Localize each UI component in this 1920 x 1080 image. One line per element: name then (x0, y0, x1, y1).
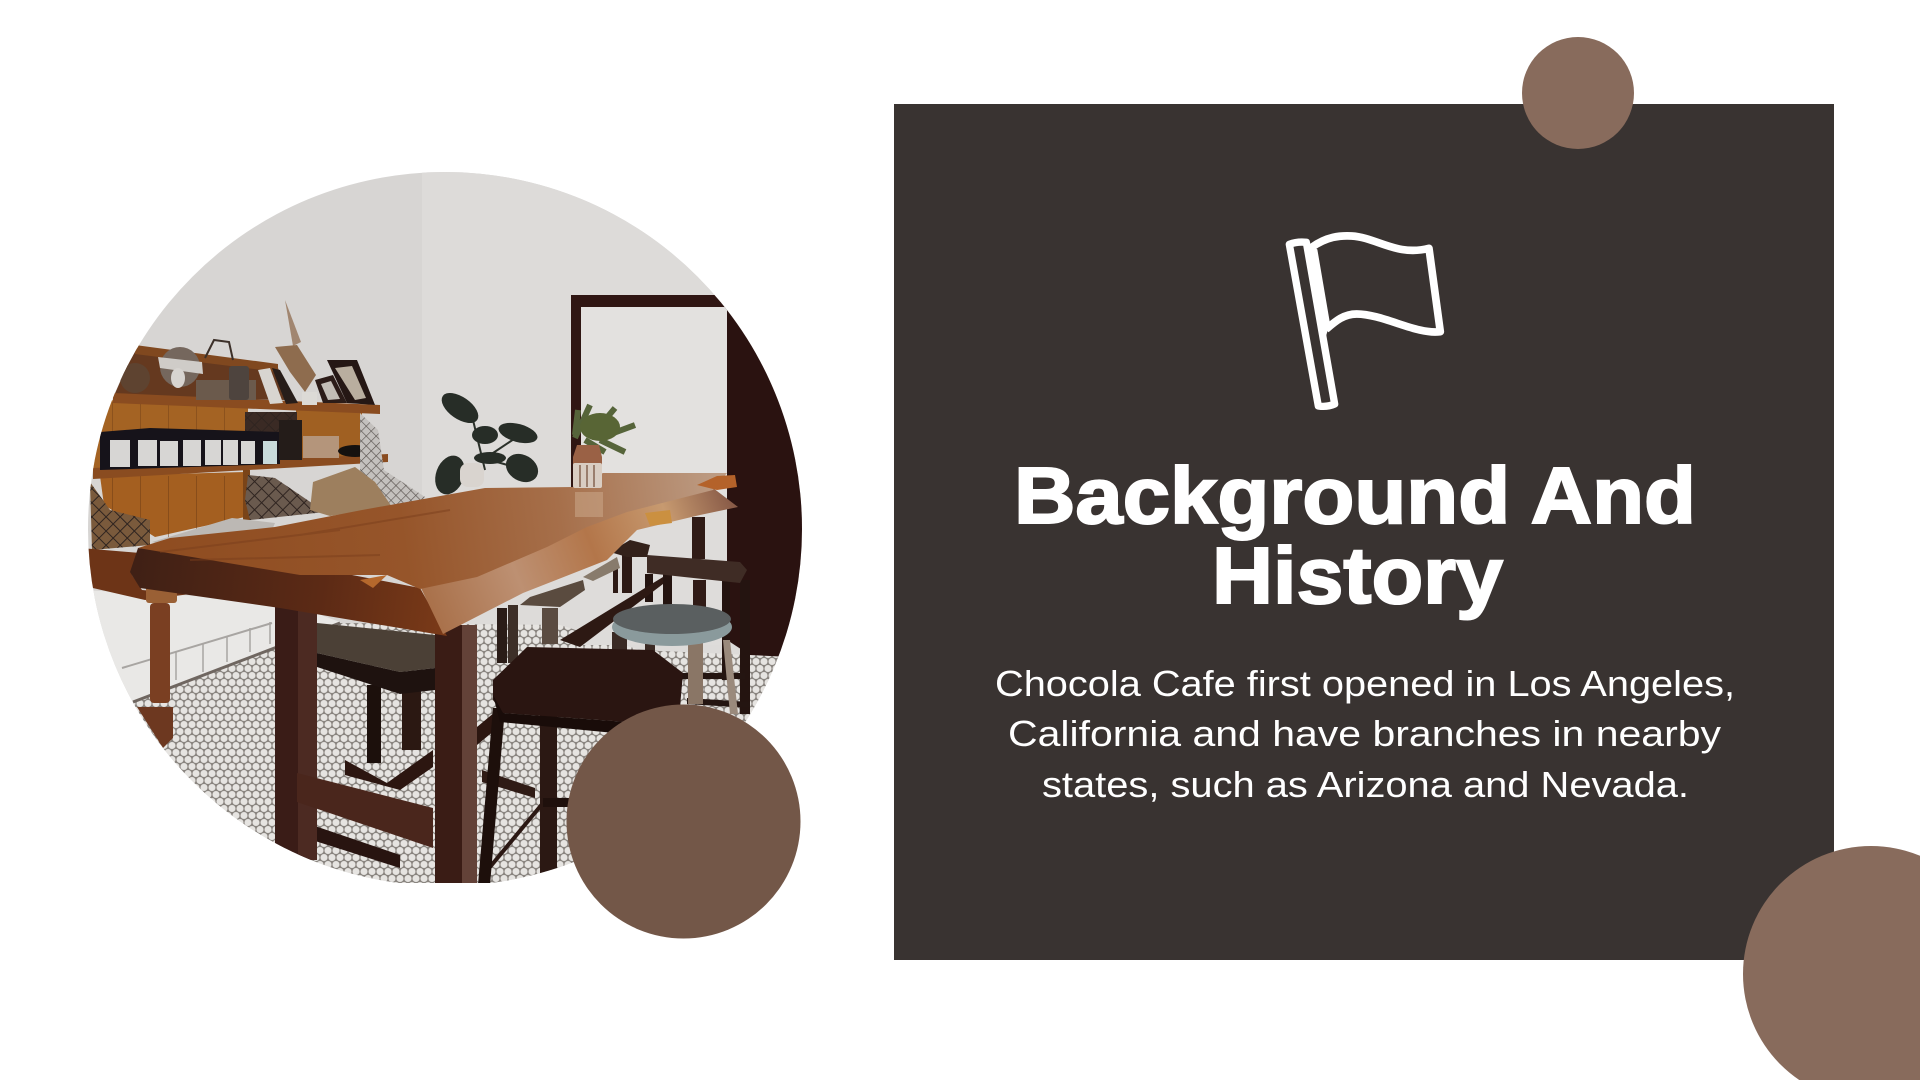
white bench (94, 590, 340, 704)
text block: description (995, 663, 1735, 805)
heading: History (1212, 531, 1504, 620)
plant (435, 393, 538, 494)
sacks and wire bench (90, 413, 425, 550)
floor (134, 623, 778, 883)
magazine (152, 518, 275, 545)
front stool (478, 647, 683, 885)
text block: description: states, such as Arizona and Nevada. (1042, 764, 1689, 805)
text block: description: California and have branches in nearby (1008, 713, 1721, 754)
wall (80, 165, 810, 895)
bench rail and turned leg (88, 548, 186, 748)
vase with greenery (573, 405, 635, 517)
text block: description: Chocola Cafe first opened in Los Angeles, (995, 663, 1735, 704)
coffee bags (100, 428, 280, 470)
wooden shelves (90, 345, 388, 538)
wall under table right (582, 636, 612, 645)
books, glasses and cap on shelf (279, 420, 360, 460)
icon: flag (1289, 236, 1440, 406)
left stool (317, 623, 435, 763)
heading (1014, 451, 1696, 620)
heading: Background And (1014, 451, 1696, 540)
circle accent: bottom right (1743, 846, 1920, 1080)
door (727, 310, 802, 656)
panel: photo of cafe interior (80, 165, 812, 895)
circle accent: over photo (566, 704, 800, 938)
table legs and braces (275, 600, 495, 887)
back stools (497, 517, 750, 714)
circle accent: top of card (1522, 37, 1634, 149)
blue stool (612, 604, 750, 714)
panel: dark text card (894, 104, 1834, 960)
table top (130, 473, 738, 636)
picture frame (571, 295, 727, 497)
shelf decor (120, 300, 375, 405)
